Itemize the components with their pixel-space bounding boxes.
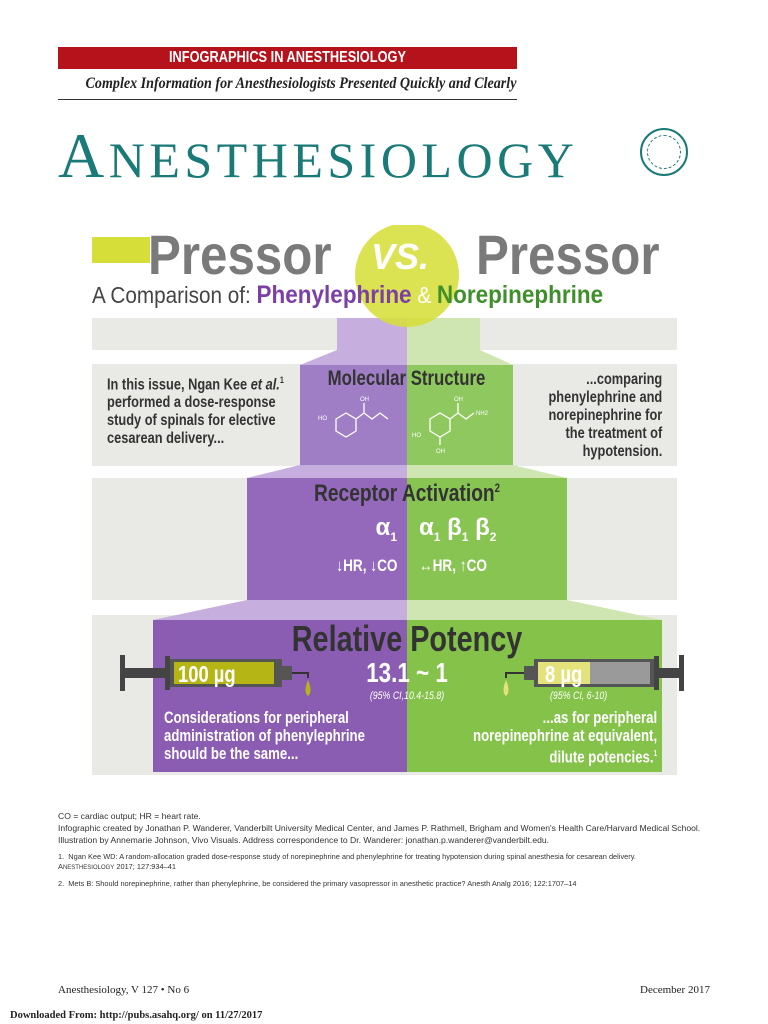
icon: seal [640, 128, 688, 176]
receptor activation panel: α1 [376, 514, 397, 544]
footnotes [58, 811, 700, 888]
infographic: VS. [371, 236, 429, 277]
right intro text: hypotension. [582, 443, 662, 460]
right intro text: norepinephrine for [548, 407, 662, 424]
journal title: ANESTHESIOLOGY [58, 120, 578, 191]
left intro text [107, 375, 284, 447]
header banner: INFOGRAPHICS IN ANESTHESIOLOGY [169, 49, 406, 66]
footnotes: ANESTHESIOLOGY 2017; 127:934–41 [58, 862, 176, 871]
footnotes: 2. Mets B: Should norepinephrine, rather than phenylephrine, be considered the primary vasopressor in anesthetic practice? Anesth Analg 2016; 122:1707–14 [58, 879, 577, 888]
left intro text: performed a dose-response [107, 394, 276, 411]
receptor activation panel: ↔HR, ↑CO [419, 556, 487, 575]
right conclusion: norepinephrine at equivalent, [473, 727, 657, 745]
receptor activation panel: Receptor Activation2 [314, 480, 500, 507]
icon: molecules: HO [412, 433, 421, 439]
icon: left syringe [120, 655, 310, 696]
relative potency panel: 8 µg [545, 661, 582, 687]
left intro text: cesarean delivery... [107, 430, 224, 447]
icon: molecules: OH [454, 397, 463, 403]
icon: molecules: HO [318, 416, 327, 422]
icon: molecules: NH2 [476, 411, 489, 417]
subtitle: Complex Information for Anesthesiologists Presented Quickly and Clearly [86, 75, 516, 92]
footnotes: CO = cardiac output; HR = heart rate. [58, 811, 201, 821]
icon: molecules: OH [436, 449, 445, 455]
left conclusion: should be the same... [164, 745, 298, 763]
right conclusion: dilute potencies.1 [549, 748, 657, 766]
left conclusion [164, 709, 365, 763]
receptor activation panel: α1 β1 β2 [419, 514, 496, 544]
ratio: 13.1 ~ 1 [366, 657, 448, 688]
right conclusion: ...as for peripheral [543, 709, 657, 727]
right intro text: phenylephrine and [548, 389, 662, 406]
left intro text: In this issue, Ngan Kee et al.1 [107, 375, 284, 393]
download line: Downloaded From: http://pubs.asahq.org/ on 11/27/2017 [10, 1010, 262, 1021]
left intro text: study of spinals for elective [107, 412, 276, 429]
text: December 2017 [640, 984, 710, 996]
left conclusion: Considerations for peripheral [164, 709, 349, 727]
icon: right syringe [504, 655, 684, 696]
page footer: Anesthesiology, V 127 • No 6 [58, 984, 189, 996]
subtitle [58, 75, 517, 100]
relative potency panel: (95% CI,10.4-15.8) [370, 690, 444, 702]
right intro text [548, 371, 662, 460]
infographic: Pressor [476, 223, 660, 286]
infographic [92, 223, 684, 775]
right intro text: the treatment of [565, 425, 662, 442]
icon: molecules [318, 396, 489, 455]
relative potency panel: Relative Potency [292, 618, 522, 659]
icon: molecules: OH [360, 397, 369, 403]
receptor activation panel: ↓HR, ↓CO [336, 556, 397, 575]
footnotes: Infographic created by Jonathan P. Wanderer, Vanderbilt University Medical Center, and James P. Rathmell, Brigham and Women's Health Care/Harvard Medical School. Illustration by Annemarie Johnson, Vivo Visuals. Address correspondence to Dr. Wanderer: jonathan.p.wanderer@vanderbilt.edu. [58, 823, 700, 845]
molecular structure panel: Molecular Structure [328, 367, 485, 390]
left conclusion: administration of phenylephrine [164, 727, 365, 745]
right intro text: ...comparing [586, 371, 662, 388]
footnotes: 1. Ngan Kee WD: A random-allocation graded dose-response study of norepinephrine and phenylephrine for treating hypotension during spinal anesthesia for cesarean delivery. [58, 852, 636, 861]
header banner [58, 47, 517, 69]
subtitle comparison: A Comparison of: Phenylephrine & Norepinephrine [92, 281, 603, 309]
relative potency panel: 100 µg [178, 661, 236, 687]
title: Pressor [148, 223, 332, 286]
receptor activation panel [314, 480, 500, 575]
relative potency panel [120, 618, 684, 766]
right conclusion [473, 709, 657, 766]
molecular structure panel [318, 367, 489, 455]
relative potency panel: (95% CI, 6-10) [550, 690, 607, 702]
